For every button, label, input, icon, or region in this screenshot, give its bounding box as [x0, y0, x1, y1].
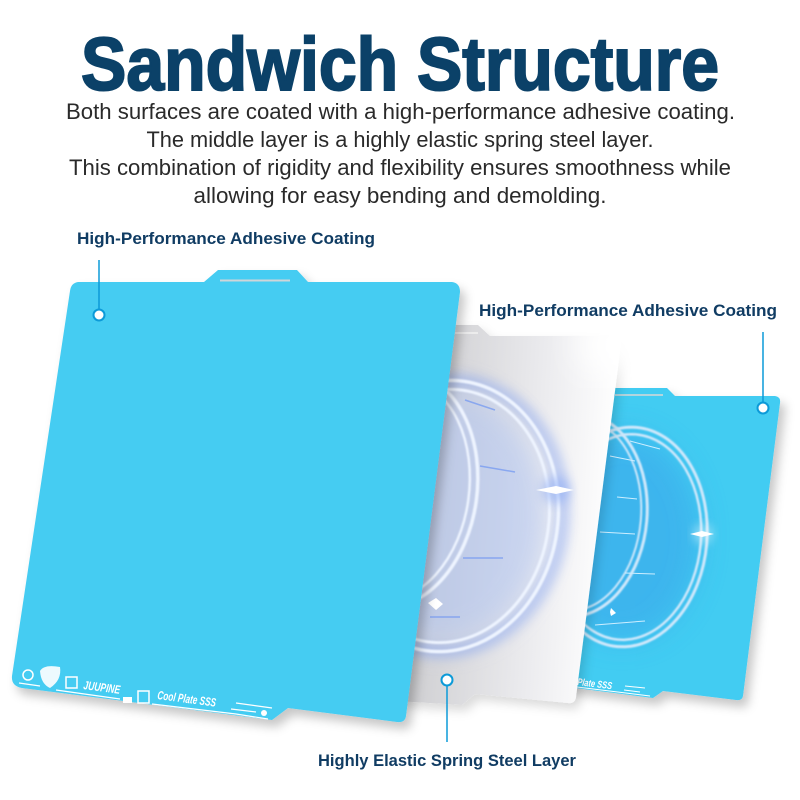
front plate hang tab line: [220, 280, 290, 282]
description text: This combination of rigidity and flexibility ensures smoothness while: [69, 155, 731, 180]
title: Sandwich Structure: [81, 22, 719, 106]
description text: [66, 99, 735, 208]
front plate printed logos and text: [23, 666, 267, 716]
panel: front adhesive coating plate: [12, 270, 460, 722]
label: right coating: High-Performance Adhesive Coating: [479, 301, 777, 320]
callout: front plate marker: [94, 260, 104, 320]
back plate printed lines: [577, 654, 650, 696]
middle plate hang tab line: [455, 332, 478, 334]
callout: back plate marker: [758, 332, 768, 414]
callout: middle plate marker: [442, 674, 452, 742]
description text: allowing for easy bending and demolding.: [194, 183, 606, 208]
label: top left coating: High-Performance Adhesive Coating: [77, 229, 375, 248]
front plate printed logos and text: Cool Plate SSS: [157, 688, 217, 710]
back plate ring glow: [584, 421, 718, 650]
back plate hang tab line: [615, 394, 663, 396]
middle plate top right fade: [616, 340, 628, 386]
description text: Both surfaces are coated with a high-performance adhesive coating.: [66, 99, 735, 124]
middle plate ring glow: [414, 368, 576, 663]
description text: The middle layer is a highly elastic spring steel layer.: [146, 127, 654, 152]
front plate printed lines: [19, 683, 272, 719]
back plate printed text: Plate SSS: [577, 677, 613, 692]
front plate printed logos and text: JUUPINE: [83, 678, 122, 697]
label: spring steel layer: Highly Elastic Spring Steel Layer: [318, 751, 576, 770]
panel: middle spring steel plate: [407, 325, 624, 714]
panel: back adhesive coating plate: [576, 388, 790, 712]
